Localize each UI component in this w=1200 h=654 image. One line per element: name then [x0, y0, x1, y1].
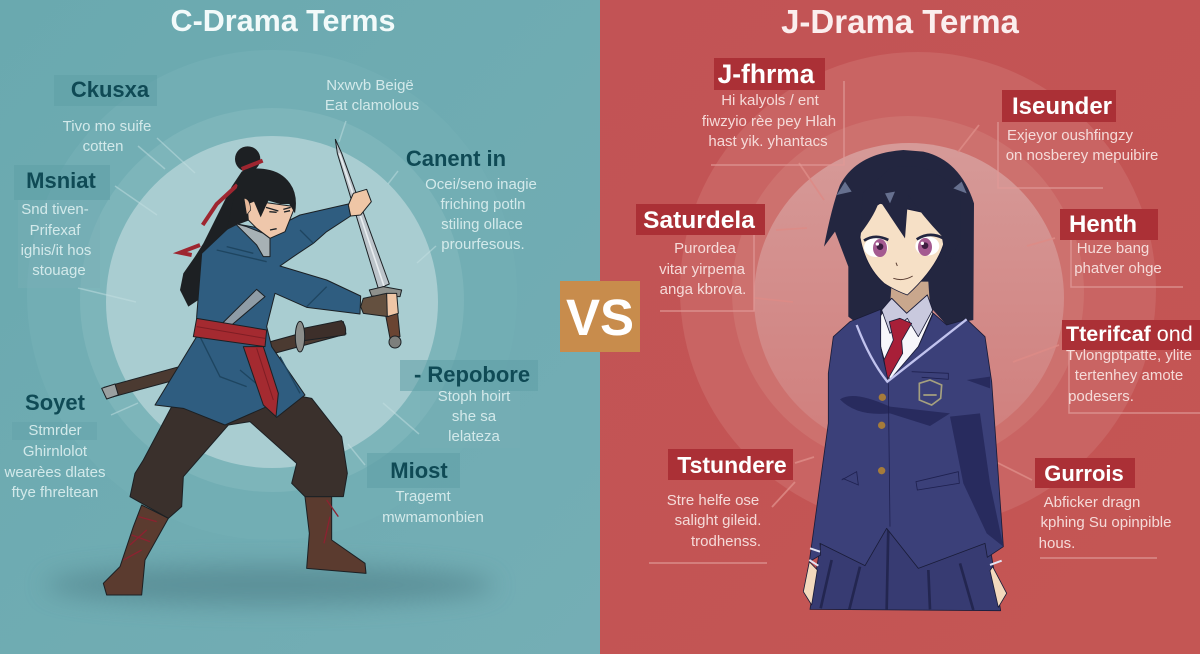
C-Drama term: Repobore: Stoph hoirt: [438, 388, 511, 405]
J-Drama term: Gurrois: hous.: [1039, 535, 1075, 552]
J-Drama term: Tterifcaf ond: tertenhey amote: [1075, 367, 1183, 384]
C-Drama term: Msniat: Snd tiven-: [21, 201, 89, 218]
buttons: [878, 394, 886, 474]
J-Drama term: Tstundere: Tstundere: [677, 452, 787, 478]
C-Drama term: Msniat: Msniat: [26, 168, 97, 193]
J-Drama term: Saturdela: anga kbrova.: [660, 281, 746, 298]
lapel stripes: [857, 319, 967, 382]
hair highlights: [837, 182, 967, 203]
C-Drama term: Repobore: she sa: [452, 408, 497, 425]
C-Drama term: Miost: Tragemt: [395, 488, 451, 505]
bangs: [861, 166, 961, 265]
hair back: [824, 150, 974, 328]
J-Drama term: Saturdela: Saturdela: [643, 207, 755, 234]
panel: J-Drama background: [600, 0, 1200, 654]
scabbard: [102, 321, 346, 399]
glove and lower hand: [361, 293, 388, 317]
C-Drama term: Msniat: stouage: [32, 262, 86, 279]
upper hand: [348, 189, 371, 216]
J-Drama term: Saturdela: vitar yirpema: [659, 261, 746, 278]
J-Drama term: J-fhrma: [702, 58, 844, 165]
J-Drama term: Henth: [1060, 209, 1183, 287]
C-Drama term: Nxwvb Beige: [325, 77, 419, 114]
J-Drama term: Saturdela: Purordea: [674, 240, 737, 257]
C-Drama term: Soyet: [4, 390, 105, 501]
J-Drama term: Iseunder: on nosberey mepuibire: [1006, 147, 1158, 164]
C-Drama term: Nxwvb Beige: Eat clamolous: [325, 97, 419, 114]
red sash: [193, 318, 267, 347]
sword blade: [335, 139, 389, 289]
hands: [803, 562, 817, 605]
C-Drama term: Ckusxa: cotten: [83, 138, 123, 155]
C-Drama term: Repobore: [400, 360, 538, 448]
C-Drama term: Nxwvb Beige: Nxwvb Beigë: [326, 77, 414, 94]
J-Drama term: Tstundere: Stre helfe ose: [667, 492, 759, 509]
C-Drama term: Msniat: Prifexaf: [30, 222, 81, 239]
heading: J-Drama Terma: J-Drama Terma: [781, 3, 1020, 40]
J-Drama term: Henth: phatver ohge: [1074, 260, 1162, 277]
J-Drama term: Gurrois: kphing Su opinpible: [1041, 514, 1171, 531]
cuffs: [809, 548, 1002, 566]
C-Drama term: Ckusxa: [54, 75, 157, 155]
J-Drama term: Iseunder: [998, 90, 1158, 188]
J-Drama term: Gurrois: Abficker dragn: [1044, 494, 1140, 511]
red hair ribbon: [180, 161, 263, 255]
J-Drama term: Saturdela: [636, 204, 765, 311]
heading: C-Drama Terms: C-Drama Terms: [171, 4, 395, 38]
C-Drama term: Soyet: Soyet: [25, 390, 86, 415]
blazer shading: [840, 377, 1003, 547]
crest: [919, 380, 942, 405]
C-Drama term: Canent in: Ocei/seno inagie: [425, 176, 537, 193]
tunic with arms: [155, 204, 361, 425]
C-Drama term: Soyet: Stmrder: [28, 422, 82, 439]
J-Drama term: J-fhrma: J-fhrma: [718, 59, 815, 89]
VS badge: [560, 281, 640, 352]
J-Drama term: Tterifcaf ond: Tterifcaf ond: [1066, 322, 1193, 346]
VS badge: VS: [566, 289, 634, 346]
J-Drama term: Iseunder: Iseunder: [1012, 93, 1112, 120]
hair back: [180, 172, 257, 307]
tie: [884, 318, 912, 380]
C-Drama term: Repobore: lelateza: [448, 428, 501, 445]
C-Drama term: Soyet: Ghirnlolot: [23, 443, 88, 460]
J-Drama term: Tterifcaf ond: [1062, 320, 1200, 413]
J-Drama term: J-fhrma: Hi kalyols / ent: [721, 92, 820, 109]
J-Drama term: Henth: Huze bang: [1077, 240, 1149, 257]
C-Drama term: Miost: mwmamonbien: [382, 509, 484, 526]
C-Drama term: Msniat: [14, 165, 110, 288]
front seam and pockets: [842, 372, 959, 527]
J-Drama term: Gurrois: [1035, 458, 1171, 558]
tunic folds: [200, 230, 327, 393]
J-Drama term: Iseunder: Exjeyor oushfingzy: [1007, 127, 1133, 144]
C-Drama term: Msniat: ighis/it hos: [21, 242, 91, 259]
shirt and collar: [880, 295, 933, 381]
topknot: [235, 146, 260, 172]
head hair: [227, 168, 296, 230]
C-Drama term: Canent in: friching potln: [440, 196, 526, 213]
nose and mouth: [893, 263, 913, 280]
J-Drama term: Tterifcaf ond: podesers.: [1068, 388, 1134, 405]
C-Drama term: Miost: [367, 453, 484, 526]
eyes: [864, 235, 943, 257]
C-Drama term: Canent in: [406, 146, 537, 253]
C-Drama term: Soyet: wearèes dlates: [4, 464, 105, 481]
J-Drama term: Tstundere: salight gileid.: [675, 512, 761, 529]
boots: [103, 497, 366, 595]
skirt: [810, 517, 1001, 611]
J-Drama term: J-fhrma: hast yik. yhantacs: [708, 133, 828, 150]
C-Drama term: Miost: Miost: [390, 458, 448, 483]
J-Drama term: Tstundere: [649, 449, 793, 563]
head: [247, 200, 295, 238]
trousers: [130, 390, 347, 518]
J-Drama term: Henth: Henth: [1069, 211, 1137, 238]
C-Drama term: Ckusxa: Tivo mo suife: [63, 118, 151, 135]
J-Drama term: Tstundere: trodhenss.: [691, 533, 761, 550]
C-Drama term: Canent in: Canent in: [406, 146, 506, 171]
J-Drama term: Gurrois: Gurrois: [1044, 461, 1124, 486]
J-Drama term: J-fhrma: fiwzyio rèe pey Hlah: [702, 113, 836, 130]
collar stripe: [222, 289, 265, 325]
J-Drama term: Tterifcaf ond: Tvlongptpatte, ylite: [1066, 347, 1192, 364]
C-Drama term: Repobore: - Repobore: [414, 362, 530, 387]
blazer: [809, 309, 1003, 568]
panel: C-Drama background: [0, 0, 600, 654]
face: [860, 203, 945, 295]
figure: schoolgirl in navy blazer: [803, 150, 1007, 611]
C-Drama term: Canent in: stiling ollace: [441, 216, 523, 233]
C-Drama term: Ckusxa: Ckusxa: [71, 77, 150, 102]
C-Drama term: Canent in: prourfesous.: [441, 236, 525, 253]
C-Drama term: Soyet: ftye fhreltean: [12, 484, 98, 501]
ear, eye and mouth: [244, 198, 251, 215]
neck: [890, 282, 930, 323]
sword guard and grip: [369, 287, 402, 297]
figure: warrior with sword: [102, 139, 402, 595]
